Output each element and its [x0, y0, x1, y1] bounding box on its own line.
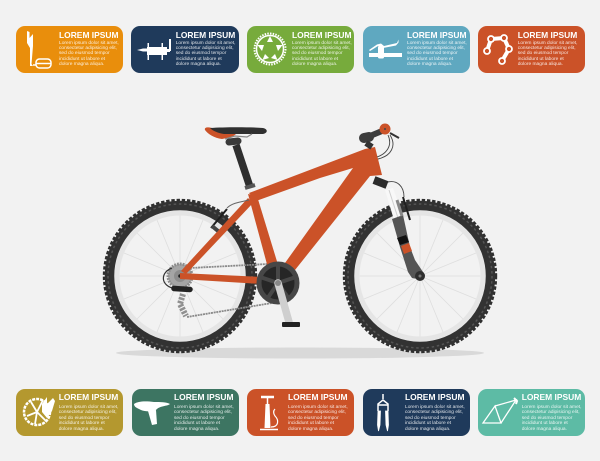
text: sed do eiusmod tempor — [176, 51, 226, 56]
text: Lorem ipsum dolor sit amet, — [518, 40, 577, 46]
text: incididunt ut labore et — [176, 57, 222, 62]
card: fork — [363, 389, 470, 436]
card: hub — [131, 26, 239, 73]
icon: crank and pedal — [27, 31, 52, 69]
frame: seat tube — [248, 194, 279, 268]
text: Lorem ipsum dolor sit amet, — [174, 405, 234, 410]
text: Lorem ipsum dolor sit amet, — [288, 405, 348, 410]
text: consectetur adipisicing elit, — [522, 410, 580, 415]
text: dolore magna aliqua. — [176, 62, 221, 67]
heading: LOREM IPSUM — [59, 30, 119, 40]
text: dolore magna aliqua. — [59, 62, 104, 67]
front wheel — [344, 200, 496, 352]
suspension fork — [385, 182, 425, 281]
heading: LOREM IPSUM — [407, 30, 467, 40]
text — [58, 404, 118, 432]
text — [292, 40, 352, 67]
text: sed do eiusmod tempor — [174, 416, 225, 421]
text: incididunt ut labore et — [518, 57, 564, 62]
heading: LOREM IPSUM — [288, 392, 348, 402]
frame: top tube, head tube and down tube — [249, 147, 382, 270]
text: Lorem ipsum dolor sit amet, — [522, 405, 581, 410]
text: dolore magna aliqua. — [292, 62, 337, 67]
heading: LOREM IPSUM — [292, 30, 352, 40]
text: Lorem ipsum dolor sit amet, — [176, 40, 235, 46]
saddle — [205, 127, 267, 139]
text: Lorem ipsum dolor sit amet, — [59, 40, 119, 46]
text — [405, 404, 465, 432]
text — [522, 404, 582, 432]
text: Lorem ipsum dolor sit amet, — [405, 405, 465, 410]
seat post — [229, 141, 255, 188]
heading: LOREM IPSUM — [59, 392, 118, 402]
text — [59, 40, 119, 67]
heading: LOREM IPSUM — [522, 392, 581, 402]
chainring and crank — [259, 264, 300, 327]
heading: LOREM IPSUM — [176, 30, 235, 40]
icon: fork — [377, 394, 389, 432]
text: incididunt ut labore et — [407, 57, 453, 62]
text: Lorem ipsum dolor sit amet, — [292, 40, 352, 46]
frame: seat and chain stays — [181, 198, 253, 274]
text: incididunt ut labore et — [288, 421, 334, 426]
icon: chain — [483, 34, 513, 65]
rear brake — [211, 200, 249, 231]
icon: brake lever — [369, 40, 402, 58]
card: chainring — [247, 26, 354, 73]
card: pedal — [16, 26, 123, 73]
heading: LOREM IPSUM — [174, 392, 234, 402]
text: sed do eiusmod tempor — [407, 51, 458, 56]
text: consectetur adipisicing elit, — [288, 410, 346, 415]
text: consectetur adipisicing elit, — [407, 46, 465, 51]
icon: bike pump — [260, 396, 278, 430]
text — [174, 404, 234, 432]
text: dolore magna aliqua. — [522, 427, 567, 432]
text: incididunt ut labore et — [59, 57, 105, 62]
card: chain — [478, 26, 585, 73]
card: brake disc — [16, 389, 123, 436]
heading: LOREM IPSUM — [405, 392, 465, 402]
text: consectetur adipisicing elit, — [174, 410, 232, 415]
text: incididunt ut labore et — [522, 421, 568, 426]
text: consectetur adipisicing elit, — [176, 46, 234, 51]
text: sed do eiusmod tempor — [292, 51, 343, 56]
text: consectetur adipisicing elit, — [59, 46, 117, 51]
text: incididunt ut labore et — [292, 57, 338, 62]
text — [176, 40, 236, 67]
text: consectetur adipisicing elit, — [59, 410, 117, 415]
text: incididunt ut labore et — [174, 421, 220, 426]
text: Lorem ipsum dolor sit amet, — [59, 405, 118, 410]
text: dolore magna aliqua. — [288, 427, 333, 432]
text — [407, 40, 467, 67]
cassette and derailleur — [163, 264, 192, 316]
chain — [187, 264, 272, 317]
text: dolore magna aliqua. — [405, 427, 450, 432]
text — [288, 404, 348, 432]
text: sed do eiusmod tempor — [522, 416, 572, 421]
text: incididunt ut labore et — [59, 421, 105, 426]
text: sed do eiusmod tempor — [405, 416, 456, 421]
text: Lorem ipsum dolor sit amet, — [407, 40, 467, 46]
text: consectetur adipisicing elit, — [405, 410, 463, 415]
text: consectetur adipisicing elit, — [292, 46, 350, 51]
text: sed do eiusmod tempor — [288, 416, 339, 421]
text: dolore magna aliqua. — [59, 427, 104, 432]
text: sed do eiusmod tempor — [59, 51, 110, 56]
icon: brake disc — [22, 397, 55, 426]
card: frame — [478, 389, 585, 436]
icon: frame outline — [482, 397, 518, 424]
text: dolore magna aliqua. — [174, 427, 219, 432]
icon: chainring — [254, 32, 286, 66]
text: sed do eiusmod tempor — [59, 416, 109, 421]
text: incididunt ut labore et — [405, 421, 451, 426]
text — [518, 40, 578, 67]
ground shadow — [116, 348, 484, 358]
card: saddle — [132, 389, 239, 436]
text: dolore magna aliqua. — [518, 62, 563, 67]
heading: LOREM IPSUM — [518, 30, 577, 40]
text: dolore magna aliqua. — [407, 62, 452, 67]
icon: saddle — [134, 401, 170, 425]
card: pump — [247, 389, 354, 436]
card: brake lever — [363, 26, 470, 73]
rear wheel — [104, 200, 256, 352]
handlebar and cables — [364, 124, 399, 185]
frame — [180, 147, 382, 284]
text: sed do eiusmod tempor — [518, 51, 568, 56]
icon: wheel hub — [137, 39, 171, 60]
text: consectetur adipisicing elit, — [518, 46, 576, 51]
